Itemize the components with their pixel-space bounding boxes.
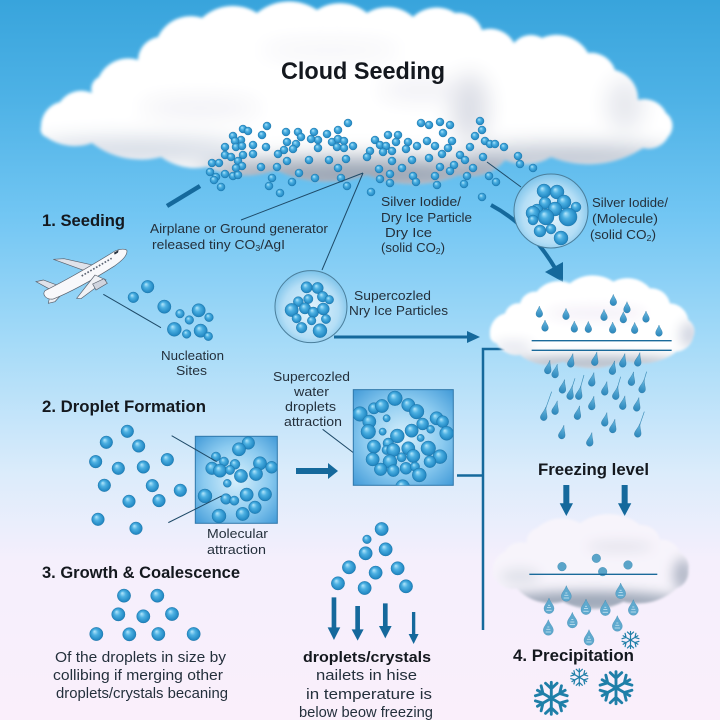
label: silver iodide particle: Silver Iodide/ xyxy=(381,194,461,209)
nucleation sites xyxy=(103,280,213,341)
label: supercooled water droplets: Supercozled xyxy=(273,369,350,384)
label: silver iodide molecule: ) xyxy=(651,227,656,242)
arrows: falling droplets xyxy=(328,597,419,644)
label: molecular attraction: Molecular xyxy=(207,526,269,541)
label: supercooled water droplets xyxy=(273,369,350,429)
text: droplets and crystals: in temperature is xyxy=(306,686,432,703)
heading: 2. droplet formation: 2. Droplet Formation xyxy=(42,397,206,416)
label: silver iodide particle: 2 xyxy=(436,246,441,256)
label: molecular attraction: attraction xyxy=(207,542,266,557)
snowflakes xyxy=(535,632,639,714)
label: supercooled ice particles: Nry Ice Particles xyxy=(349,303,449,318)
label: nucleation sites: Sites xyxy=(176,363,208,378)
label: silver iodide molecule: 2 xyxy=(647,233,652,243)
seed particles in cloud xyxy=(206,117,537,201)
label: molecular attraction xyxy=(207,526,269,557)
label: nucleation sites xyxy=(161,348,224,378)
panel: molecular attraction xyxy=(168,436,278,523)
flight dash xyxy=(167,186,200,206)
bracket connector xyxy=(457,349,505,630)
label: supercooled ice particles xyxy=(349,288,449,318)
arrows: below freezing level xyxy=(560,485,631,516)
icon: airplane xyxy=(36,249,127,303)
label: airplane or generator: Airplane or Ground generator xyxy=(150,221,329,236)
icy drops xyxy=(543,583,638,645)
label: silver iodide particle xyxy=(381,194,472,256)
heading: freezing level: Freezing level xyxy=(538,460,649,479)
text: droplets and crystals: droplets/crystals xyxy=(303,649,431,666)
inset: supercooled ice particles xyxy=(275,271,347,343)
label: silver iodide particle: (solid CO xyxy=(381,240,435,255)
heading: 4. precipitation: 4. Precipitation xyxy=(513,646,634,665)
label: supercooled water droplets: attraction xyxy=(284,414,342,429)
label: supercooled ice particles: Supercozled xyxy=(354,288,431,303)
droplets: falling xyxy=(331,522,413,595)
droplets: formation xyxy=(89,425,187,535)
text: growth description: collibing if merging other xyxy=(53,667,223,684)
label: supercooled water droplets: droplets xyxy=(285,399,337,414)
text: droplets and crystals xyxy=(299,649,433,720)
label: airplane or generator: /AgI xyxy=(260,237,285,252)
label: airplane or generator: 3 xyxy=(255,243,261,253)
label: silver iodide molecule: Silver Iodide/ xyxy=(592,195,668,210)
inset: silver iodide molecule xyxy=(514,174,588,248)
title: Cloud Seeding xyxy=(281,58,445,85)
label: nucleation sites: Nucleation xyxy=(161,348,224,363)
text: growth description xyxy=(53,649,228,702)
panel: supercooled water droplets xyxy=(323,390,454,494)
label: silver iodide particle: Dry Ice Particle xyxy=(381,210,472,225)
lower right cloud xyxy=(493,514,693,612)
curved arrow to cloud xyxy=(491,205,563,282)
label: supercooled water droplets: water xyxy=(293,384,330,399)
text: growth description: Of the droplets in size by xyxy=(55,649,227,666)
label: airplane or generator xyxy=(150,221,329,253)
arrow: to supercooled panel xyxy=(296,463,338,479)
droplets: growth xyxy=(90,589,200,641)
text: growth description: droplets/crystals becaning xyxy=(56,685,228,702)
label: silver iodide molecule: (Molecule) xyxy=(592,211,658,226)
text: droplets and crystals: nailets in hise xyxy=(316,667,417,684)
heading: 3. growth and coalescence: 3. Growth & Coalescence xyxy=(42,563,240,582)
label: silver iodide particle: Dry Ice xyxy=(385,225,432,240)
label: silver iodide particle: ) xyxy=(441,240,445,255)
label: silver iodide molecule xyxy=(590,195,668,243)
upper right cloud xyxy=(490,275,700,370)
main cloud xyxy=(30,1,680,191)
heading: 1. seeding: 1. Seeding xyxy=(42,211,125,230)
rain drops xyxy=(540,351,648,447)
leader lines xyxy=(241,162,521,270)
label: airplane or generator: released tiny CO xyxy=(152,237,249,252)
arrow: to right cloud xyxy=(334,331,480,343)
label: silver iodide molecule: (solid CO xyxy=(590,227,644,242)
